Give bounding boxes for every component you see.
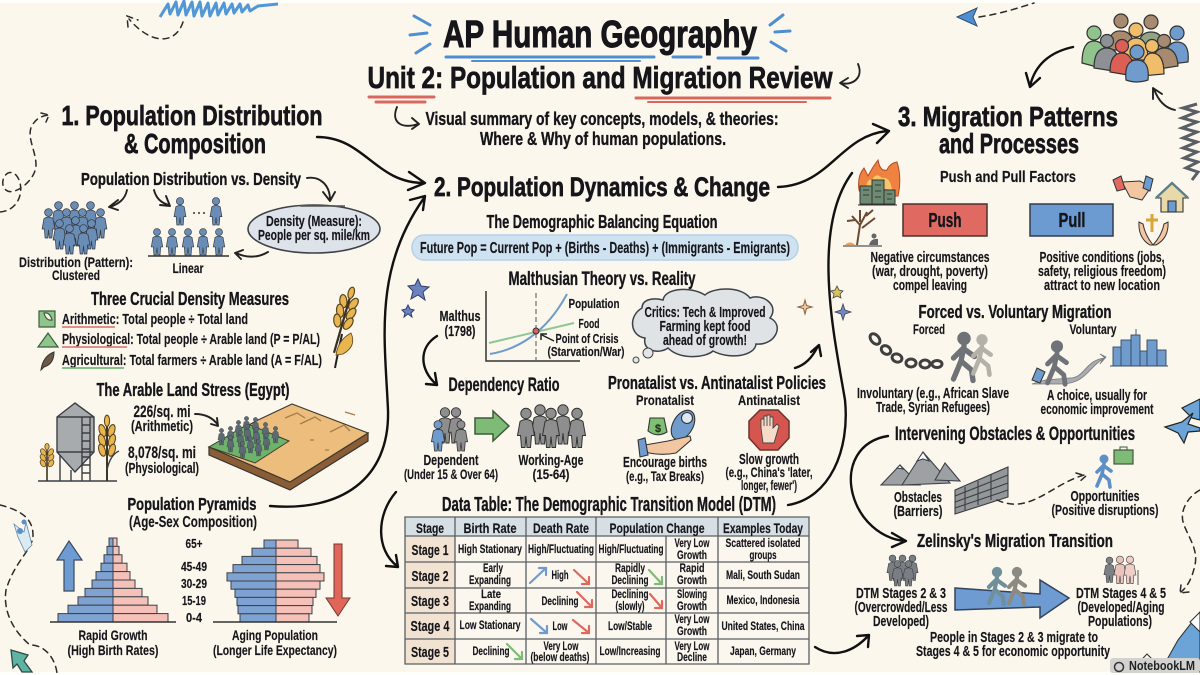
data table: demographic transition model: Expanding <box>469 599 511 613</box>
pyramid age labels: 65+ <box>186 537 202 551</box>
data table: demographic transition model: Stage <box>416 520 444 536</box>
heading 3: 3. Migration Patterns <box>898 101 1118 132</box>
icon: land block with crowd <box>209 404 368 490</box>
icon: up arrow <box>57 541 82 591</box>
text: push <box>870 250 990 294</box>
chart: malthus graph: (Starvation/War) <box>548 344 624 359</box>
data table: demographic transition model: Very Low <box>674 536 710 550</box>
icon: mountains <box>881 452 960 485</box>
scribble: blue top <box>160 1 278 17</box>
chart: malthus graph: Population <box>568 296 620 311</box>
label: clustered: Distribution (Pattern): <box>19 254 133 270</box>
button: push: Push <box>928 210 962 232</box>
connecting arrows <box>270 47 1175 653</box>
icon: left bird <box>14 520 32 552</box>
measure: physiological: Physiological: Total people ÷ Arable land (P = P/AL) <box>62 331 320 348</box>
text: voluntary: economic improvement <box>1040 402 1154 418</box>
heading 1 <box>62 100 322 159</box>
data table: demographic transition model: Examples Today <box>723 520 803 536</box>
label: slow growth <box>726 452 812 493</box>
subheading: push pull: Push and Pull Factors <box>940 169 1076 186</box>
labels: obstacles opportunities: Opportunities <box>1070 488 1140 505</box>
subheading: egypt: The Arable Land Stress (Egypt) <box>96 380 290 400</box>
text: involuntary <box>857 386 1009 416</box>
subtitle: Unit 2: Population and Migration Review <box>368 60 833 95</box>
arrows from subheading <box>109 178 335 259</box>
subheading: dependency ratio: Dependency Ratio <box>448 375 560 396</box>
icon: stop hand <box>749 410 789 450</box>
equation pill: Future Pop = Current Pop + (Births - Deaths) + (Immigrants - Emigrants) <box>420 240 790 257</box>
table title: Data Table: The Demographic Transition Model (DTM) <box>442 494 776 516</box>
data table: demographic transition model: Rapidly <box>615 561 645 575</box>
text: involuntary: Trade, Syrian Refugees) <box>876 400 990 416</box>
pyramid captions <box>68 627 337 658</box>
data table: demographic transition model: Very Low <box>674 639 710 653</box>
data table: demographic transition model: Population Change <box>610 520 705 536</box>
labels: obstacles opportunities <box>894 488 1158 520</box>
icon: sparkle <box>798 300 812 314</box>
icon: baby money hand: $ <box>655 423 661 435</box>
label: stages 2 3 <box>854 586 948 630</box>
label: malthus <box>440 309 480 340</box>
section 1: population distribution and composition <box>19 100 380 658</box>
icon: fleeing people <box>954 332 991 380</box>
table trend arrows <box>507 568 662 659</box>
label: clustered: Clustered <box>52 267 100 283</box>
labels: dependency: Dependent <box>424 453 479 469</box>
data table: demographic transition model: Declining <box>612 587 648 601</box>
data table: demographic transition model <box>405 517 809 664</box>
arrow: green dependency <box>475 411 509 441</box>
button: pull: Pull <box>1058 210 1086 232</box>
labels: obstacles opportunities: (Barriers) <box>894 503 943 520</box>
icon: chain <box>868 332 942 368</box>
icon: migrating walkers <box>989 567 1025 604</box>
text: involuntary: Involuntary (e.g., African Slave <box>857 386 1009 402</box>
data table: demographic transition model: Late <box>481 587 501 601</box>
heading 2: 2. Population Dynamics & Change <box>434 172 770 202</box>
text: pull <box>1038 250 1166 294</box>
arrow: review <box>840 64 860 88</box>
subheading: forced vs voluntary: Forced vs. Voluntary Migration <box>918 302 1112 322</box>
data table: demographic transition model: Low <box>552 619 568 633</box>
icon: dependent people <box>431 408 468 451</box>
arable stats <box>125 402 199 477</box>
arrow: dashed right <box>1180 490 1200 593</box>
label: stages 2 3: (Overcrowded/Less <box>854 600 948 616</box>
label: stages 2 3: Developed) <box>873 614 929 630</box>
arable stats: (Arithmetic) <box>131 419 193 435</box>
pyramid captions: Aging Population <box>232 627 318 643</box>
data table: demographic transition model: Birth Rate <box>464 520 517 536</box>
pyramid captions: (Longer Life Expectancy) <box>213 642 337 658</box>
icon: house <box>1156 183 1188 212</box>
text: push: (war, drought, poverty) <box>872 264 988 280</box>
data table: demographic transition model: Expanding <box>469 573 511 587</box>
icon: agricultural leaf <box>41 352 54 370</box>
icon: arithmetic map <box>39 311 55 327</box>
heading 3 <box>898 101 1118 159</box>
icon: traveler and swoosh <box>1032 341 1106 384</box>
label: antinatalist: Antinatalist <box>738 392 800 408</box>
data table: demographic transition model: Scattered isolated <box>726 536 800 550</box>
density measures: Three Crucial Density Measures <box>91 289 289 309</box>
data table: demographic transition model: Slowing <box>677 587 707 601</box>
data table: demographic transition model: Stage 2 <box>412 568 448 585</box>
icon: right birds <box>1165 399 1200 443</box>
icon: brick wall <box>955 467 1008 514</box>
arrow: dashed to opportunity <box>997 473 1086 504</box>
subheading: malthus: Malthusian Theory vs. Reality <box>508 269 696 290</box>
title block <box>368 14 860 149</box>
callout: critics thought cloud: ahead of growth! <box>663 333 747 349</box>
pyramid captions: Rapid Growth <box>78 627 148 643</box>
summary text <box>426 109 778 149</box>
data table: demographic transition model: Stage 3 <box>411 593 449 610</box>
icon: silo and wheat <box>38 403 119 481</box>
icon: physiological triangle <box>38 333 58 347</box>
data table: demographic transition model: Growth <box>677 548 707 562</box>
icon: burning building <box>858 160 900 205</box>
label: linear: Linear <box>172 260 204 276</box>
data table: demographic transition model: (below deaths) <box>530 650 590 664</box>
arable stats: (Physiological) <box>125 461 199 477</box>
data table: demographic transition model: Very Low <box>674 612 710 626</box>
button: push <box>903 204 987 236</box>
label: encourage births <box>623 455 707 484</box>
icon: clustered people <box>42 202 107 254</box>
data table: demographic transition model: High/Fluctuating <box>528 542 594 556</box>
text: push: compel leaving <box>893 278 967 294</box>
subtitle underline: red <box>369 97 830 102</box>
labels: obstacles opportunities: Obstacles <box>894 489 942 506</box>
icon: large wheat <box>323 284 364 368</box>
section 2: population dynamics and change <box>402 172 826 664</box>
label: encourage births: Encourage births <box>623 455 707 471</box>
heading 3: and Processes <box>939 128 1079 159</box>
label: slow growth: Slow growth <box>739 452 799 468</box>
summary text: Visual summary of key concepts, models, & theories: <box>426 109 778 129</box>
labels: dependency: (15-64) <box>532 466 570 482</box>
arrow: stat to land <box>195 414 218 426</box>
data table: demographic transition model: Stage 5 <box>411 644 449 661</box>
arrow: blue top right <box>957 3 1034 26</box>
label: slow growth: (e.g., China's 'later, <box>726 465 812 480</box>
label: encourage births: (e.g., Tax Breaks) <box>626 469 704 484</box>
icon: down arrow <box>326 544 350 616</box>
icon: working age people <box>518 405 586 448</box>
icons: small stars <box>831 286 851 320</box>
icons: stars <box>402 279 429 317</box>
label: stages 4 5 <box>1076 586 1166 630</box>
heading 1: & Composition <box>124 128 266 159</box>
labels: dependency <box>404 453 584 482</box>
highlights <box>62 327 127 368</box>
data table: demographic transition model: Declining <box>472 644 510 658</box>
icon: crowded group <box>887 555 918 586</box>
measure: agricultural: Agricultural: Total farmers ÷ Arable land (A = F/AL) <box>62 352 322 369</box>
labels: dependency: (Under 15 & Over 64) <box>404 466 498 482</box>
data table: demographic transition model: Mexico, Indonesia <box>726 593 800 607</box>
labels: forced voluntary: Forced <box>913 321 945 337</box>
labels: dependency: Working-Age <box>518 453 584 469</box>
icon: skyline <box>1110 329 1168 366</box>
label: pronatalist: Pronatalist <box>636 392 694 408</box>
data table: demographic transition model: Low/Increasing <box>600 644 660 658</box>
subheading: zelinsky: Zelinsky's Migration Transition <box>917 531 1113 551</box>
label: clustered <box>19 254 133 283</box>
section 3: migration patterns and processes <box>831 14 1188 660</box>
callout: density: People per sq. mile/km <box>258 228 370 244</box>
label: stages 4 5: DTM Stages 4 & 5 <box>1076 586 1166 602</box>
labels: forced voluntary <box>913 321 1117 337</box>
data table: demographic transition model: Low/Stable <box>608 619 652 633</box>
data table: demographic transition model: Declining <box>542 594 578 608</box>
subheading: balancing equation: The Demographic Balancing Equation <box>486 212 718 232</box>
density measures <box>38 289 322 370</box>
heading 1: 1. Population Distribution <box>62 100 322 131</box>
equation pill <box>412 235 798 260</box>
pyramid age labels: 15-19 <box>182 594 206 608</box>
arrow: dashed left loop <box>0 113 49 212</box>
callout: density <box>248 205 380 253</box>
data table: demographic transition model: Very Low <box>544 639 579 653</box>
subheading: policies: Pronatalist vs. Antinatalist Policies <box>608 373 826 393</box>
data table: demographic transition model: Growth <box>677 573 707 587</box>
data table: demographic transition model: Rapid <box>680 561 704 575</box>
text: zelinsky summary: People in Stages 2 & 3 migrate to <box>930 629 1098 646</box>
data table: demographic transition model: High Stationary <box>458 542 522 556</box>
arable stats: 8,078/sq. mi <box>128 443 196 462</box>
main title: AP Human Geography <box>443 14 757 56</box>
callout: critics thought cloud <box>633 289 777 363</box>
data table: demographic transition model: United States, China <box>722 619 805 633</box>
icon: baby money hand <box>638 406 700 457</box>
data table: demographic transition model: Japan, Germany <box>730 644 796 658</box>
data table: demographic transition model: High/Fluctuating <box>598 542 664 556</box>
arrow: dashed top left <box>127 16 183 39</box>
pyramid age labels <box>181 537 207 625</box>
icon: elderly group <box>1104 556 1138 585</box>
summary text: Where & Why of human populations. <box>480 129 726 149</box>
icon: linear people <box>148 198 229 256</box>
subheading: distribution vs density: Population Distribution vs. Density <box>81 169 301 189</box>
data table: demographic transition model: High <box>552 568 568 582</box>
labels: forced voluntary: Voluntary <box>1070 321 1117 337</box>
label: stages 4 5: Populations) <box>1088 614 1152 630</box>
text: zelinsky summary <box>916 629 1110 660</box>
data table: demographic transition model: Growth <box>677 599 707 613</box>
text: voluntary <box>1040 388 1154 418</box>
chart: aging pyramid <box>213 540 337 622</box>
callout: density: Density (Measure): <box>266 214 362 230</box>
arrow: blue migration <box>955 580 1069 618</box>
icon: colorful crowd <box>1082 14 1188 82</box>
subheading: pyramids: Population Pyramids <box>128 494 257 514</box>
arable stats: 226/sq. mi <box>134 402 190 421</box>
data table: demographic transition model: Early <box>483 561 503 575</box>
button: pull <box>1030 204 1113 236</box>
pyramid age labels: 30-29 <box>181 577 207 591</box>
callout: critics thought cloud: Critics: Tech & Improved <box>644 305 766 321</box>
pyramid age labels: 0-4 <box>186 611 202 625</box>
chart: malthus graph: Food <box>578 316 600 331</box>
data table: demographic transition model: Mali, South Sudan <box>726 568 800 582</box>
data table: demographic transition model: Low Stationary <box>460 618 521 632</box>
chart: rapid growth pyramid <box>50 538 176 622</box>
icon: mountains corner <box>1130 612 1200 672</box>
data table: demographic transition model: (slowly) <box>616 599 645 613</box>
chart: malthus graph <box>486 291 624 361</box>
subheading: pyramids <box>128 494 257 531</box>
arrow: dashed left lower <box>0 505 57 673</box>
label: slow growth: longer, fewer') <box>741 478 797 493</box>
label: malthus: (1798) <box>444 324 476 340</box>
data table: demographic transition model: Growth <box>677 624 707 638</box>
measure: arithmetic: Arithmetic: Total people ÷ Total land <box>62 311 248 328</box>
icon: walker and briefcase <box>1097 447 1133 487</box>
label: stages 4 5: (Developed/Aging <box>1078 600 1164 616</box>
data table: demographic transition model: Declining <box>612 573 648 587</box>
data table: demographic transition model: Stage 4 <box>410 618 450 635</box>
subheading: pyramids: (Age-Sex Composition) <box>129 514 257 531</box>
callout: critics thought cloud: Farming kept food <box>660 319 750 335</box>
icon: handshake <box>1113 176 1153 200</box>
text: zelinsky summary: Stages 4 & 5 for economic opportunity <box>916 643 1110 660</box>
data table: demographic transition model: Stage 1 <box>412 542 448 559</box>
chart: malthus graph: Point of Crisis <box>556 331 618 346</box>
arrow: summary <box>395 107 419 129</box>
label: malthus: Malthus <box>440 309 480 325</box>
title underline: blue <box>446 57 758 61</box>
label: stages 2 3: DTM Stages 2 & 3 <box>856 586 946 602</box>
text: voluntary: A choice, usually for <box>1047 388 1147 404</box>
data table: demographic transition model: groups <box>750 548 777 562</box>
pyramid captions: (High Birth Rates) <box>68 642 158 658</box>
data table: demographic transition model: Death Rate <box>533 520 589 536</box>
text: pull: attract to new location <box>1044 278 1160 294</box>
arrow: teal corner <box>11 650 32 672</box>
data table: demographic transition model: Decline <box>677 650 707 664</box>
title rays <box>410 15 790 53</box>
pyramid age labels: 45-49 <box>181 560 207 574</box>
icon: praying hands and cross <box>1139 214 1168 245</box>
scribble: grey right <box>1182 104 1198 180</box>
icon: dead tree <box>843 210 882 246</box>
text: push: Negative circumstances <box>870 250 990 266</box>
